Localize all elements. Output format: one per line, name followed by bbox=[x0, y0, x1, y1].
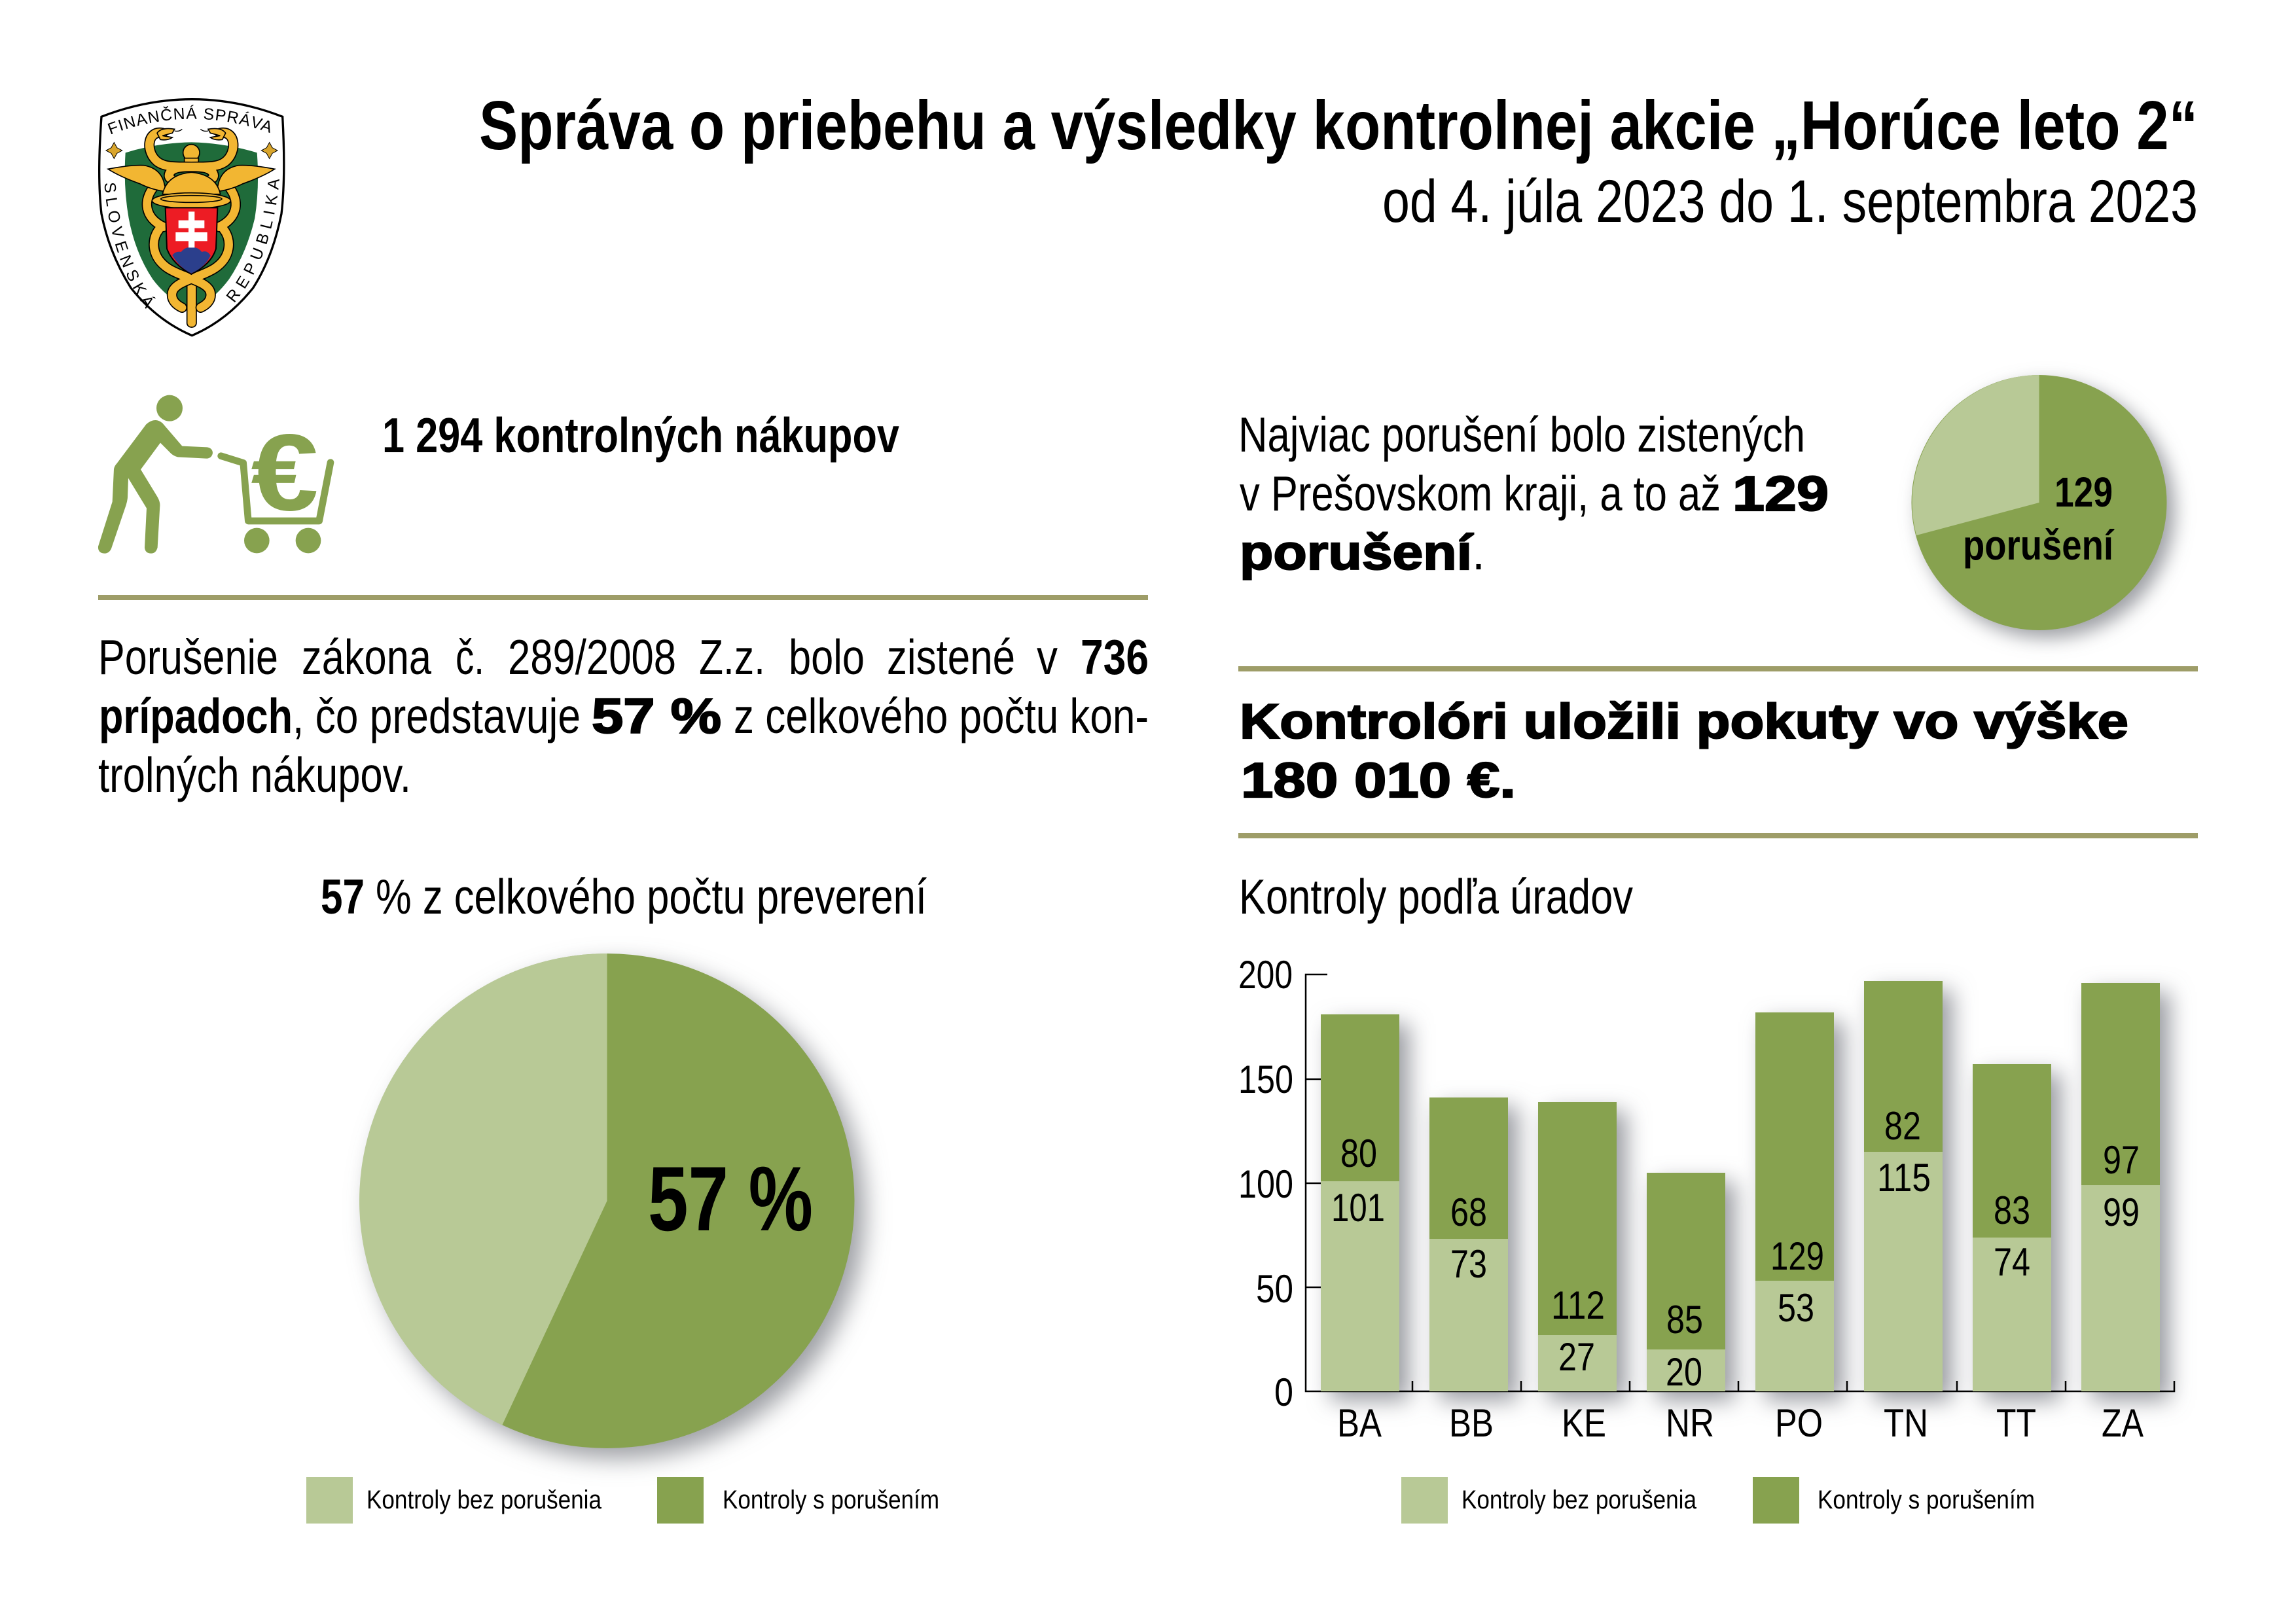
y axis labels: 150 bbox=[1238, 1058, 1293, 1101]
text block: most violations in Prešov region bbox=[1238, 407, 1829, 580]
y axis labels: 0 bbox=[1274, 1370, 1293, 1414]
callout: fines imposed bbox=[1240, 694, 2128, 808]
text block: violation of the law: 289/2008 bbox=[508, 630, 676, 685]
rule bbox=[98, 595, 1148, 600]
bar value labels: 74 bbox=[1994, 1240, 2030, 1284]
pie chart: 57 %: 57 % bbox=[648, 1147, 813, 1250]
x axis labels: BB bbox=[1449, 1401, 1494, 1445]
logo: Finančná správa shield bbox=[98, 98, 285, 336]
bar value labels: 73 bbox=[1450, 1242, 1487, 1286]
legend: bar chart bbox=[1401, 1477, 2035, 1524]
heading: left pie chart: 57 bbox=[321, 869, 365, 924]
y axis labels bbox=[1238, 953, 1293, 1414]
logo: Finančná správa shield: FINANČNÁ SPRÁVA bbox=[107, 105, 270, 135]
text block: violation of the law: trolných nákupov. bbox=[98, 747, 411, 802]
bar value labels: 53 bbox=[1778, 1286, 1814, 1330]
bar value labels: 115 bbox=[1877, 1156, 1931, 1200]
icon: person pushing shopping cart with euro bbox=[98, 395, 331, 554]
bar value labels: 27 bbox=[1558, 1335, 1595, 1379]
logo: Finančná správa shield: REPUBLIKA bbox=[226, 179, 279, 302]
bar value labels: 112 bbox=[1551, 1283, 1605, 1327]
chart axes bbox=[1306, 974, 2174, 1391]
bar value labels: 82 bbox=[1884, 1104, 1921, 1148]
bar value labels: 83 bbox=[1994, 1188, 2030, 1232]
pie chart: 129 violations bbox=[1911, 375, 2166, 630]
bar value labels: 99 bbox=[2103, 1190, 2140, 1234]
bar value labels: 101 bbox=[1331, 1186, 1385, 1230]
bar value labels: 85 bbox=[1666, 1298, 1703, 1342]
text block: most violations in Prešov region: Najviac porušení bolo zistených bbox=[1238, 407, 1805, 462]
legend: left pie: Kontroly s porušením bbox=[723, 1486, 939, 1514]
x axis labels: BA bbox=[1337, 1401, 1382, 1445]
bar value labels: 20 bbox=[1666, 1350, 1702, 1394]
text block: violation of the law: 736 bbox=[1081, 630, 1149, 685]
text block: violation of the law: Z.z. bbox=[699, 630, 765, 685]
text block: violation of the law bbox=[98, 630, 1149, 802]
legend: bar chart: Kontroly s porušením bbox=[1818, 1486, 2035, 1514]
y axis labels: 50 bbox=[1256, 1267, 1293, 1311]
heading: bar chart: Kontroly podľa úradov bbox=[1239, 869, 1633, 924]
pie chart: 57 % bbox=[359, 954, 855, 1448]
text block: violation of the law: č. bbox=[456, 630, 484, 685]
x axis labels bbox=[1337, 1401, 2144, 1445]
pie chart: 129 violations: porušení bbox=[1963, 522, 2115, 569]
text block: violation of the law: , čo predstavuje bbox=[293, 688, 581, 743]
rule bbox=[1238, 833, 2198, 838]
text block: violation of the law: 57 % bbox=[592, 688, 721, 743]
bar chart: controls by office bbox=[1238, 953, 2174, 1445]
text block: most violations in Prešov region: . bbox=[1472, 525, 1485, 580]
text block: violation of the law: z celkového počtu kon- bbox=[734, 688, 1149, 743]
text block: most violations in Prešov region: 129 bbox=[1732, 466, 1829, 521]
logo: Finančná správa shield: SLOVENSKÁ bbox=[105, 183, 156, 309]
bar value labels: 68 bbox=[1450, 1190, 1487, 1234]
text block: most violations in Prešov region: v Prešovskom kraji, a to až bbox=[1240, 466, 1721, 521]
x axis labels: NR bbox=[1666, 1401, 1714, 1445]
text block: violation of the law: v bbox=[1037, 630, 1058, 685]
x axis labels: TT bbox=[1996, 1401, 2036, 1445]
text block: violation of the law: bolo bbox=[789, 630, 865, 685]
dark bars: controls with violation bbox=[1321, 981, 2160, 1350]
text block: violation of the law: zákona bbox=[302, 630, 431, 685]
legend: left pie: Kontroly bez porušenia bbox=[367, 1486, 602, 1514]
heading: number of control purchases: 1 294 kontrolných nákupov bbox=[382, 408, 899, 463]
text block: most violations in Prešov region: porušení bbox=[1240, 525, 1473, 580]
legend: left pie bbox=[306, 1477, 939, 1524]
pie chart: 129 violations: 129 bbox=[2054, 469, 2113, 516]
x axis labels: PO bbox=[1775, 1401, 1823, 1445]
icon: person pushing shopping cart with euro: € bbox=[251, 412, 319, 533]
y axis labels: 200 bbox=[1238, 953, 1293, 997]
callout: fines imposed: Kontrolóri uložili pokuty vo výške bbox=[1240, 694, 2128, 749]
legend: bar chart: Kontroly bez porušenia bbox=[1462, 1486, 1697, 1514]
heading: left pie chart: % z celkového počtu preverení bbox=[376, 869, 927, 924]
text block: violation of the law: prípadoch bbox=[99, 688, 293, 743]
text block: violation of the law: Porušenie bbox=[98, 630, 278, 685]
bar value labels: 129 bbox=[1770, 1234, 1824, 1278]
text block: violation of the law: zistené bbox=[887, 630, 1015, 685]
x axis labels: KE bbox=[1562, 1401, 1606, 1445]
bar value labels bbox=[1331, 1104, 2140, 1394]
bar value labels: 80 bbox=[1340, 1132, 1377, 1175]
x axis labels: TN bbox=[1884, 1401, 1928, 1445]
y axis labels: 100 bbox=[1238, 1162, 1293, 1206]
x axis labels: ZA bbox=[2102, 1401, 2144, 1445]
light bars: controls without violation bbox=[1321, 1152, 2160, 1391]
bar value labels: 97 bbox=[2103, 1138, 2140, 1182]
callout: fines imposed: 180 010 €. bbox=[1241, 753, 1516, 808]
rule bbox=[1238, 666, 2198, 671]
